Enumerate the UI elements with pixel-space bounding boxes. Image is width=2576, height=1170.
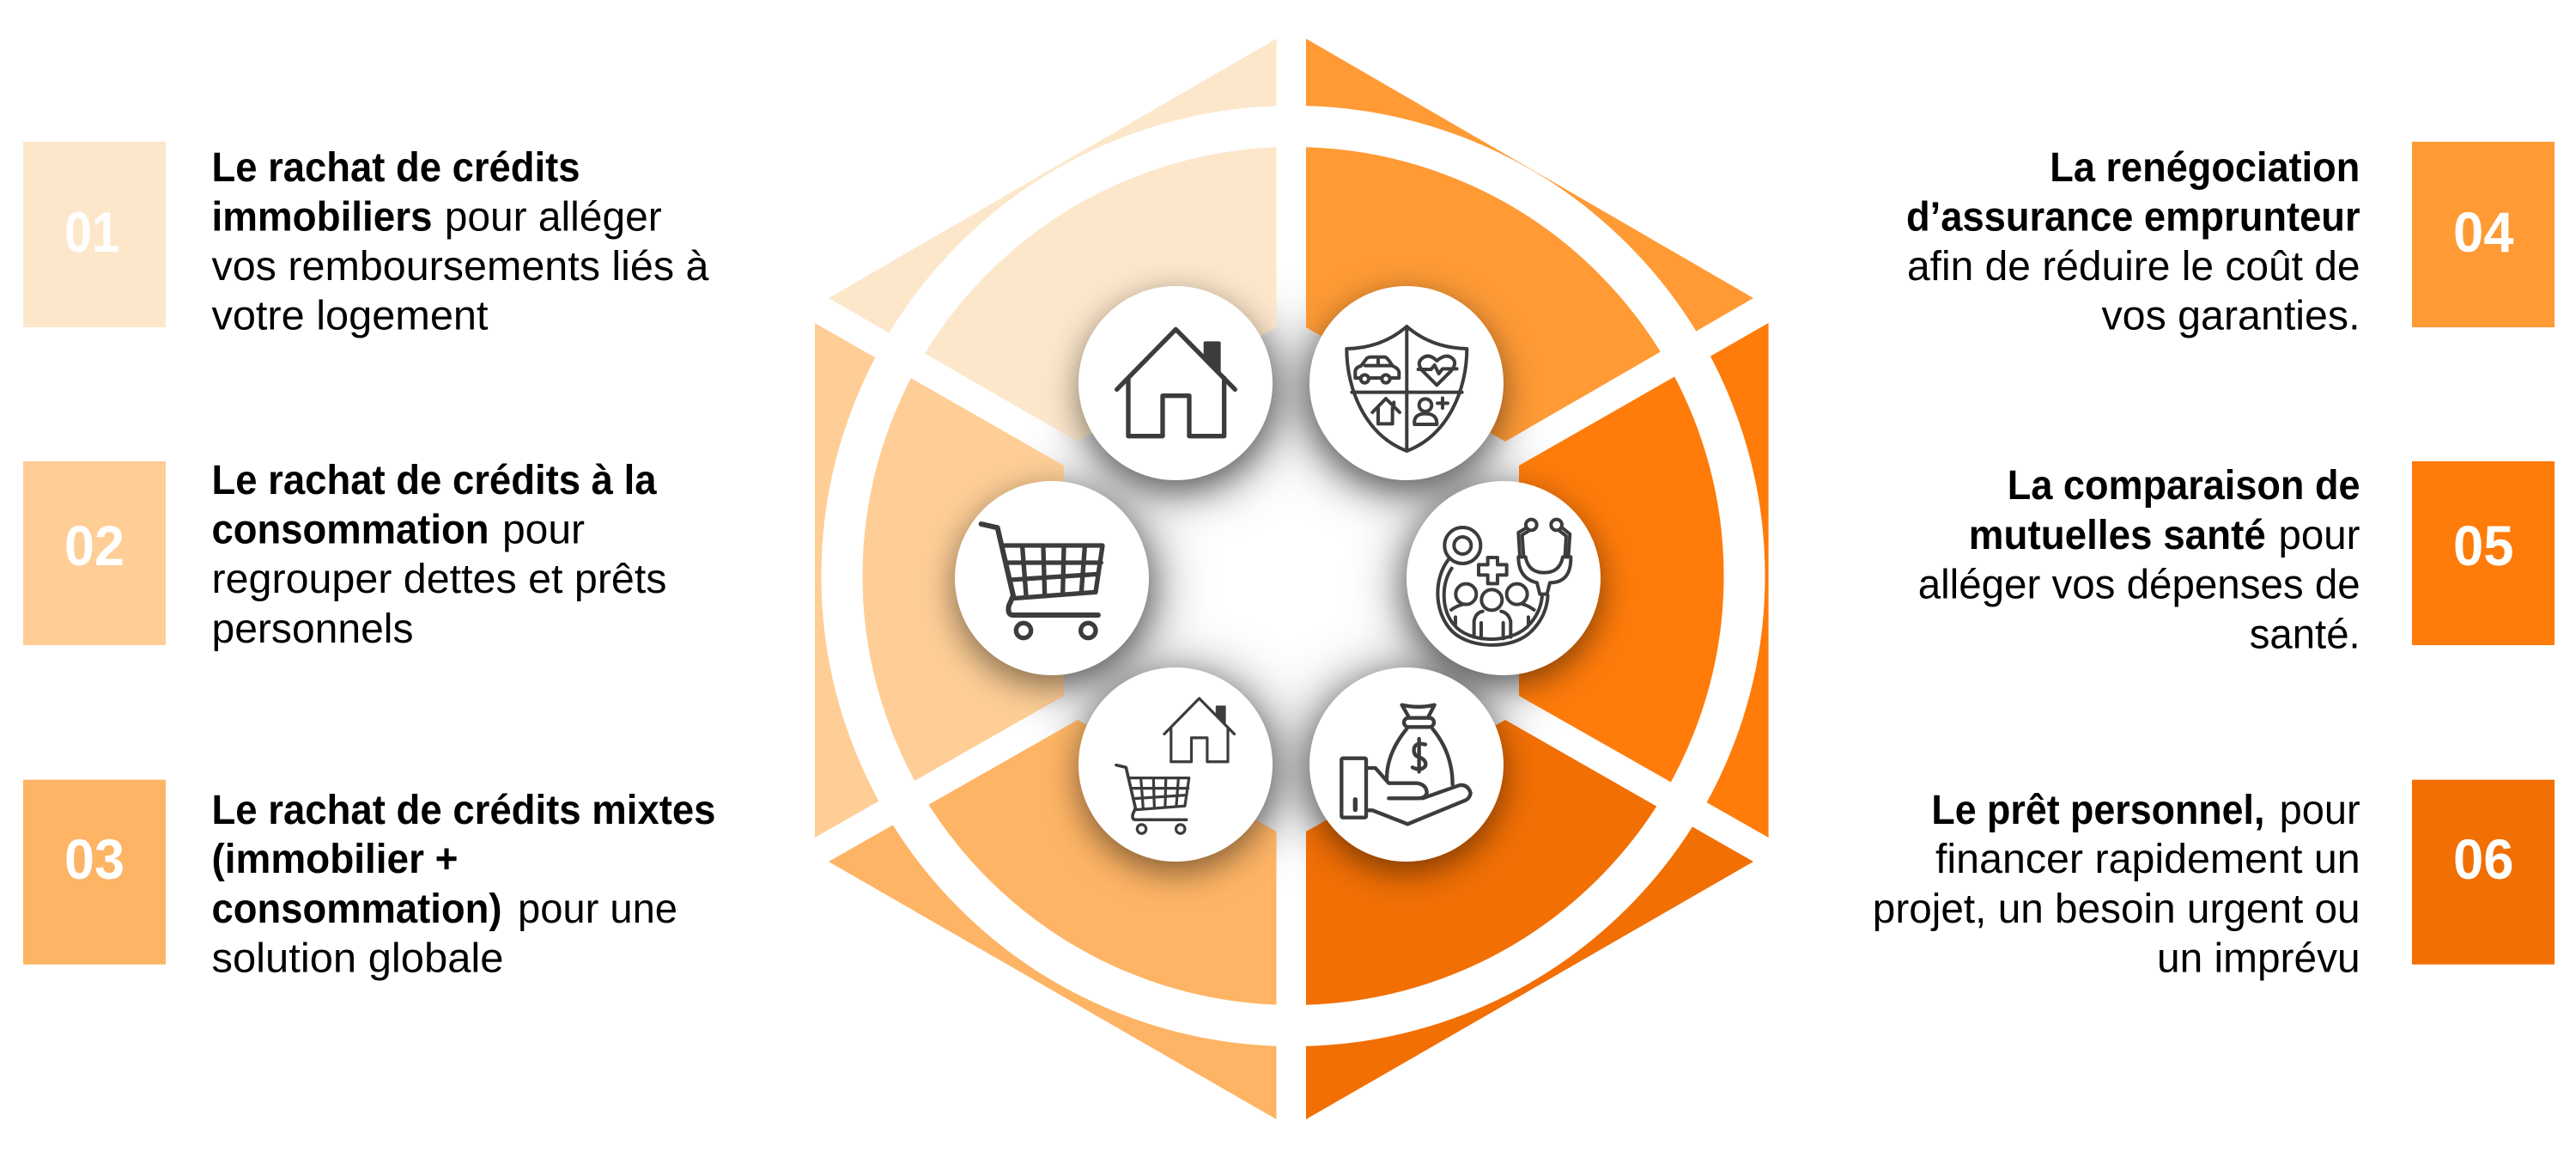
text 03: Le rachat de crédits mixtes bbox=[211, 788, 716, 833]
text 05: alléger vos dépenses de bbox=[1918, 563, 2360, 608]
white ring bbox=[841, 126, 1745, 1026]
text 06: projet, un besoin urgent ou bbox=[1873, 887, 2360, 932]
number box 06 bbox=[2412, 780, 2555, 965]
text 06: pour bbox=[2280, 788, 2360, 833]
number box 02 bbox=[23, 461, 166, 645]
text 03: (immobilier + bbox=[211, 837, 459, 882]
segment 2 bbox=[815, 323, 1064, 838]
number 05: 05 bbox=[2453, 514, 2514, 577]
text 03: solution globale bbox=[211, 936, 503, 982]
text 06: Le prêt personnel, bbox=[1931, 788, 2264, 833]
text 01 bbox=[211, 145, 709, 339]
text 04: vos garanties. bbox=[2102, 294, 2360, 339]
item 02 bbox=[23, 458, 666, 652]
number box 05 bbox=[2412, 461, 2555, 645]
text 03 bbox=[211, 788, 716, 982]
text 03: consommation) bbox=[211, 887, 501, 932]
text 03: pour une bbox=[518, 887, 677, 932]
item 01 bbox=[23, 142, 709, 339]
text 06 bbox=[1873, 788, 2360, 982]
text 04: d’assurance emprunteur bbox=[1906, 195, 2360, 241]
number 04: 04 bbox=[2453, 200, 2514, 264]
icon circle: money bag in hand bbox=[1309, 667, 1504, 862]
text 05 bbox=[1918, 463, 2360, 657]
text 01: votre logement bbox=[211, 294, 488, 339]
number box 04 bbox=[2412, 142, 2555, 327]
number box 03 bbox=[23, 780, 166, 965]
segment 5 bbox=[1519, 323, 1769, 838]
segment 1 bbox=[829, 39, 1276, 442]
number 02: 02 bbox=[64, 514, 125, 577]
segment 6 bbox=[1306, 720, 1753, 1119]
hexagon diagram bbox=[815, 39, 1769, 1119]
circle shadows bbox=[955, 296, 1601, 872]
icon circle: insurance shield bbox=[1309, 286, 1504, 480]
text 02 bbox=[211, 458, 666, 652]
text 02: Le rachat de crédits à la bbox=[211, 458, 657, 503]
item 04 bbox=[1906, 142, 2555, 339]
segment 3 bbox=[829, 720, 1276, 1119]
text 02: consommation bbox=[211, 508, 489, 553]
number 06: 06 bbox=[2453, 827, 2514, 891]
text 01: Le rachat de crédits bbox=[211, 145, 580, 191]
text 02: regrouper dettes et prêts bbox=[211, 557, 666, 602]
number box 01 bbox=[23, 142, 166, 327]
text 02: pour bbox=[502, 508, 585, 553]
text 04: afin de réduire le coût de bbox=[1907, 244, 2360, 289]
text 05: pour bbox=[2279, 513, 2360, 558]
text 02: personnels bbox=[211, 606, 414, 652]
icon circle: house and cart bbox=[1078, 667, 1273, 862]
icon circle: shopping cart bbox=[955, 481, 1149, 675]
item 06 bbox=[1873, 780, 2555, 982]
text 01: vos remboursements liés à bbox=[211, 244, 709, 289]
number 01: 01 bbox=[64, 200, 119, 264]
text 01: immobiliers bbox=[211, 195, 433, 241]
icon circle: family health stethoscope bbox=[1406, 481, 1601, 675]
text 05: La comparaison de bbox=[2008, 463, 2360, 509]
centre shadow bbox=[962, 290, 1600, 868]
icon circle: house bbox=[1078, 286, 1273, 480]
text 06: financer rapidement un bbox=[1935, 837, 2360, 882]
text 06: un imprévu bbox=[2157, 936, 2360, 982]
text 04: La renégociation bbox=[2050, 145, 2360, 191]
item 03 bbox=[23, 780, 716, 982]
item 05 bbox=[1918, 461, 2555, 657]
text 05: santé. bbox=[2250, 612, 2360, 657]
text 01: pour alléger bbox=[445, 195, 662, 241]
text 05: mutuelles santé bbox=[1969, 513, 2266, 558]
number 03: 03 bbox=[64, 827, 125, 891]
text 04 bbox=[1906, 145, 2360, 339]
segment 4 bbox=[1306, 39, 1753, 442]
